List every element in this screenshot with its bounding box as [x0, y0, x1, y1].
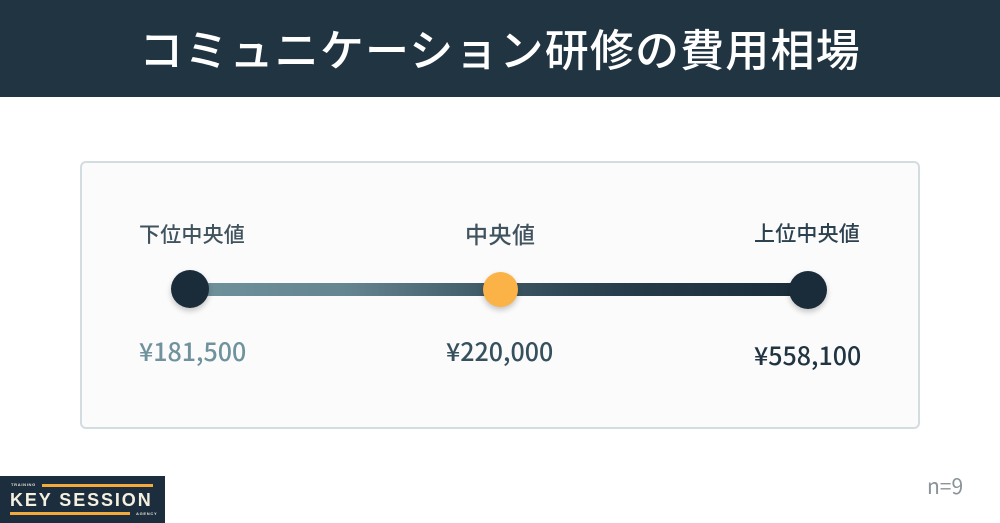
panel: price range [80, 161, 920, 429]
logo small text: training: TRAINING [11, 482, 36, 487]
title: コミュニケーション研修の費用相場 [139, 15, 861, 79]
marker: upper median [789, 271, 827, 309]
label: lower median: 下位中央値 [139, 219, 245, 249]
logo top rule [42, 484, 153, 487]
marker: median [483, 272, 518, 307]
value: lower median: ¥181,500 [139, 333, 246, 369]
range bar [190, 283, 810, 296]
logo name: KEY SESSION [10, 490, 153, 510]
value: median: ¥220,000 [446, 333, 553, 369]
marker: lower median [171, 270, 209, 308]
logo small text: agency: AGENCY [136, 511, 157, 516]
label: upper median: 上位中央値 [754, 218, 860, 248]
sample size note: n=9 [927, 471, 963, 501]
logo: Key Session [0, 476, 165, 523]
value: upper median: ¥558,100 [754, 337, 861, 373]
logo bottom rule [10, 512, 130, 515]
title banner [0, 0, 1000, 97]
label: median: 中央値 [465, 216, 536, 250]
